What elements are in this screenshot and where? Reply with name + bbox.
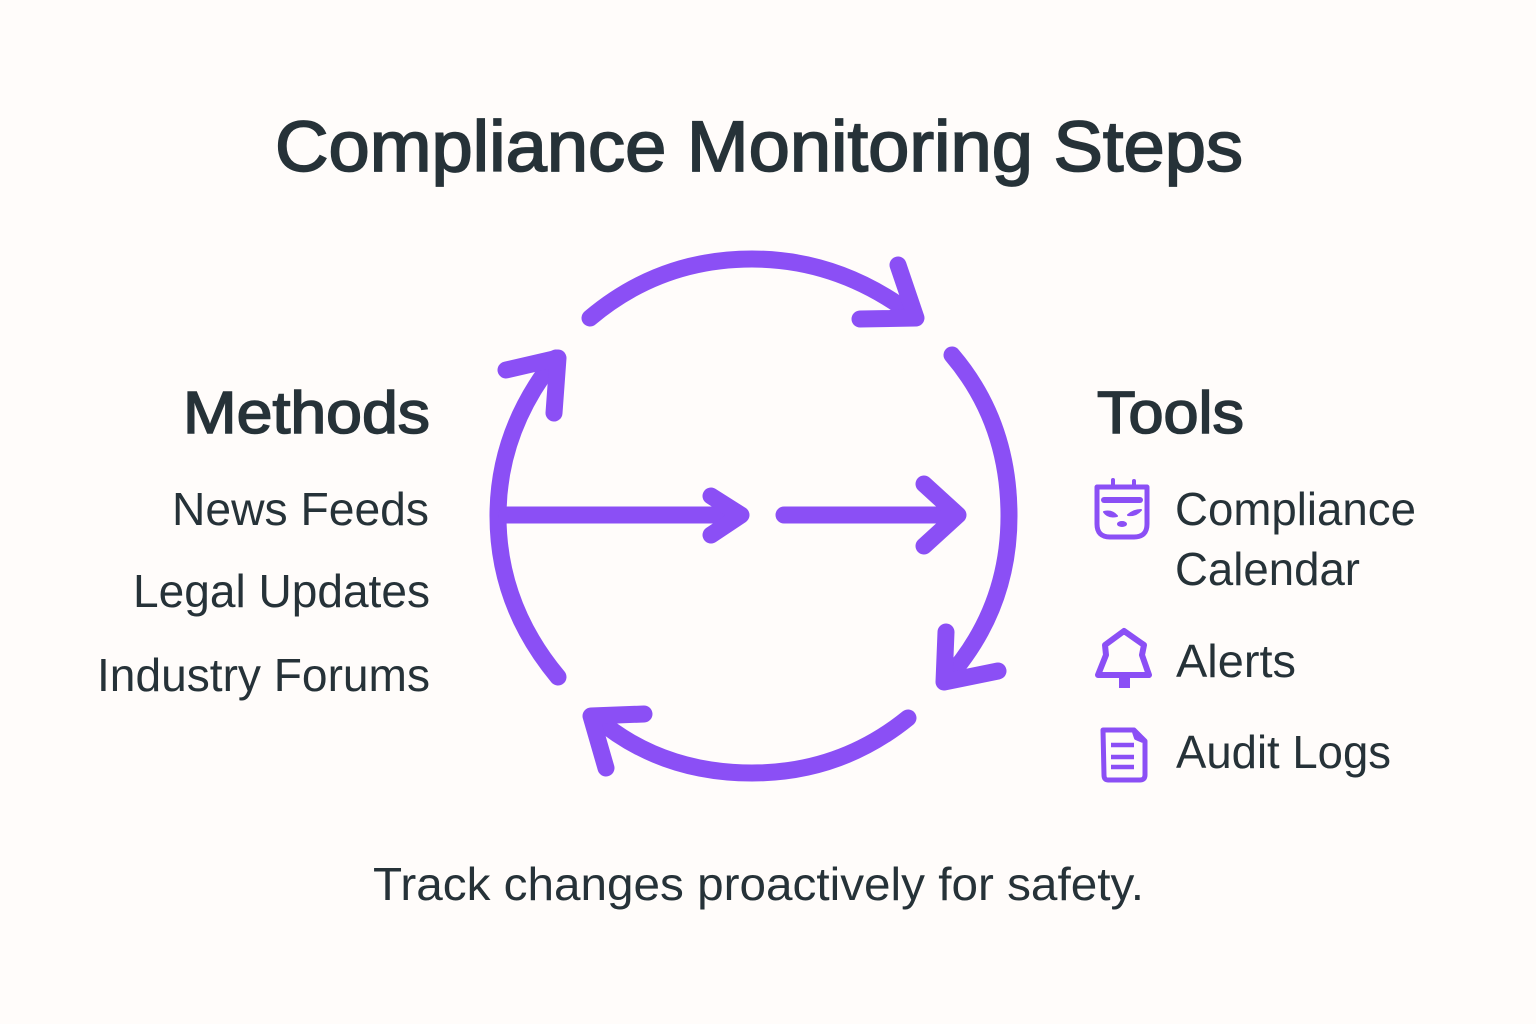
icon: bell xyxy=(1098,631,1149,688)
label: alerts: Alerts xyxy=(1176,635,1296,687)
icon: document xyxy=(1103,730,1145,780)
arrow: middle left xyxy=(507,496,741,535)
icon: calendar xyxy=(1097,480,1147,537)
methods list xyxy=(97,483,430,701)
label: compliance calendar: Compliance xyxy=(1175,483,1416,535)
caption: Track changes proactively for safety. xyxy=(373,858,1144,910)
label: audit logs: Audit Logs xyxy=(1176,726,1391,778)
arrow: middle right xyxy=(784,484,958,546)
heading: tools: Tools xyxy=(1097,380,1244,446)
method: legal updates: Legal Updates xyxy=(133,565,430,617)
method: industry forums: Industry Forums xyxy=(97,649,430,701)
arrow: bottom arc xyxy=(591,714,908,773)
label: compliance calendar: Calendar xyxy=(1175,543,1360,595)
arrow: top arc xyxy=(590,259,916,319)
method: news feeds: News Feeds xyxy=(172,483,429,535)
heading: methods: Methods xyxy=(183,380,430,446)
cycle diagram xyxy=(498,259,1009,773)
arrow: right arc xyxy=(944,355,1009,682)
title: Compliance Monitoring Steps xyxy=(275,108,1243,187)
label: compliance calendar xyxy=(1175,483,1416,595)
arrow: left arc xyxy=(498,358,558,677)
